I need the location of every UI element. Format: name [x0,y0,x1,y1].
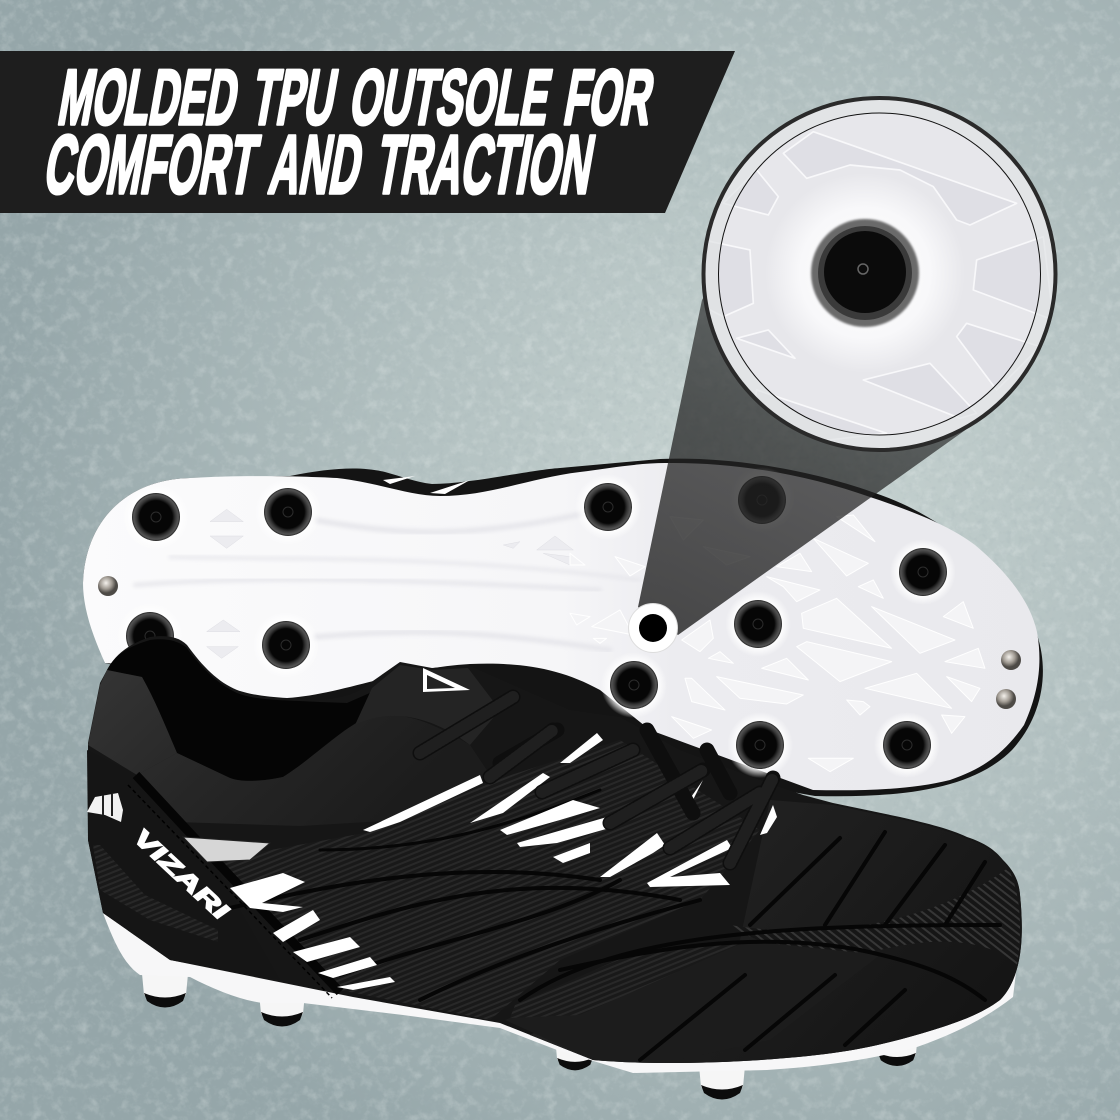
title text: COMFORT AND TRACTION [39,118,601,211]
stitched seams [230,790,1000,1060]
white midsole [100,890,1020,1073]
ribbed midfoot panel [215,740,760,1020]
boot upper silhouette [88,636,1022,1063]
toe leather panels [505,800,1022,1063]
forefoot tread marks [570,515,985,772]
screw-in studs [117,467,956,778]
title banner [0,51,735,213]
heel logo mark [87,793,123,822]
heel mesh print [183,837,270,862]
heel ribbed insert [93,845,218,942]
zoom callout cone [638,200,1000,635]
side view boot [87,636,1022,1100]
title text [39,54,660,211]
laces [420,697,773,863]
white upper stripes [230,733,777,990]
quarter leather panel [137,715,490,826]
tongue eyelet panel [355,665,500,745]
upper peeking behind outsole [83,459,1043,796]
collar lining [107,639,372,781]
second boot seen from below: outsole [83,459,1043,796]
white plate [83,463,1039,790]
brand name: VIZARI [127,826,236,923]
heel counter [88,670,177,775]
callout marker dot [628,604,678,652]
inset stud [811,219,919,327]
seam band across heel [136,775,340,992]
inset tread detail [722,131,1036,434]
eyelet logo [423,668,470,692]
heel tread marks [207,509,573,658]
heel tab dark panel [87,750,280,980]
inset ring [704,98,1056,450]
heel channels [135,510,640,650]
magnified inset circle [702,97,1056,451]
studs on side view [141,963,919,1100]
metal rivets [98,576,1021,709]
